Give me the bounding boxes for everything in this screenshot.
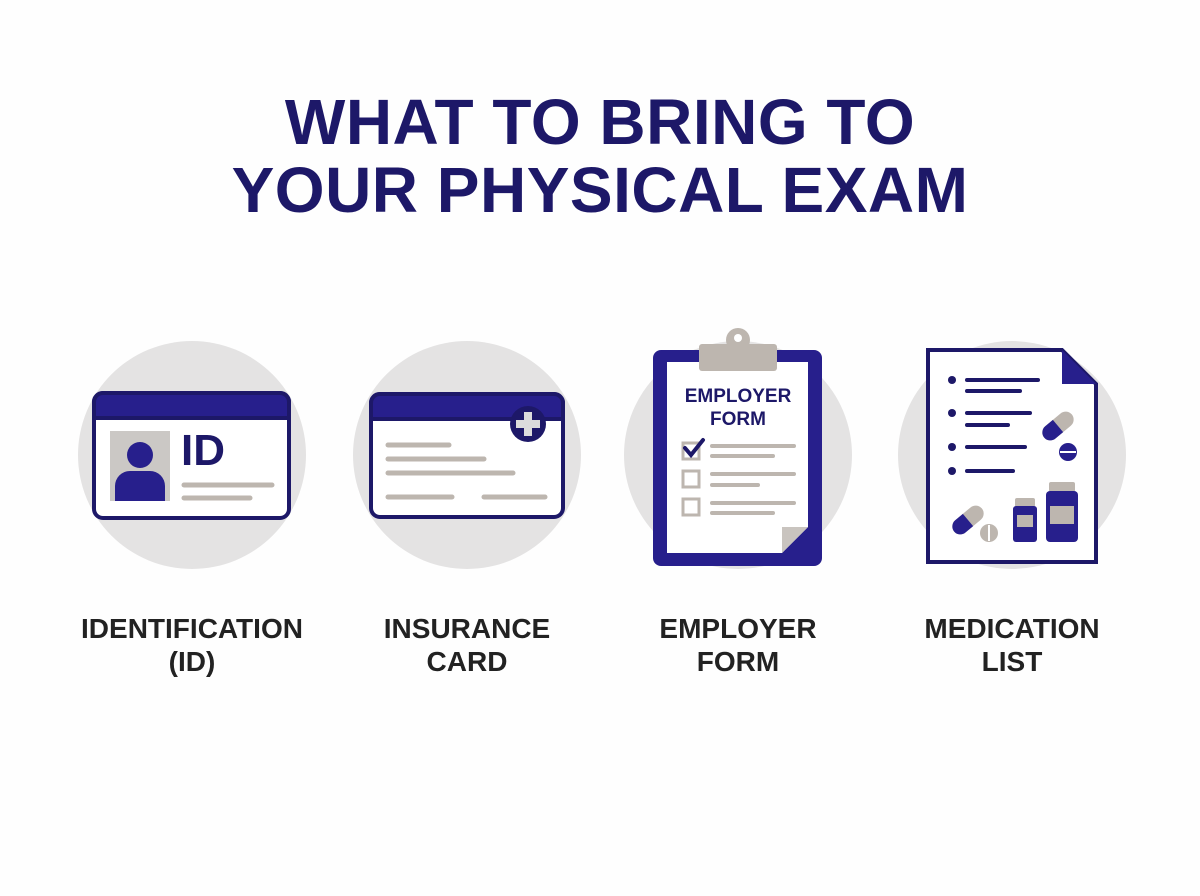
icon: employer form clipboard xyxy=(624,328,852,569)
label: identification: (ID) xyxy=(169,646,215,677)
label: employer form xyxy=(659,613,817,677)
title: YOUR PHYSICAL EXAM xyxy=(232,154,968,226)
label: identification xyxy=(81,613,303,677)
label: medication list: LIST xyxy=(982,646,1042,677)
icon: employer form clipboard: EMPLOYER xyxy=(685,386,792,407)
label: medication list xyxy=(924,613,1100,677)
icon: insurance card xyxy=(353,341,581,569)
label: identification: IDENTIFICATION xyxy=(81,613,303,644)
icon: ID card xyxy=(78,341,306,569)
label: employer form: FORM xyxy=(697,646,779,677)
title xyxy=(232,86,968,226)
icon: employer form clipboard: FORM xyxy=(710,409,766,430)
icon: ID card: ID xyxy=(181,426,225,475)
label: insurance card xyxy=(384,613,550,677)
label: insurance card: CARD xyxy=(427,646,507,677)
title: WHAT TO BRING TO xyxy=(285,86,915,158)
label: employer form: EMPLOYER xyxy=(659,613,817,644)
icon: medication list xyxy=(898,341,1126,569)
label: insurance card: INSURANCE xyxy=(384,613,550,644)
label: medication list: MEDICATION xyxy=(924,613,1100,644)
